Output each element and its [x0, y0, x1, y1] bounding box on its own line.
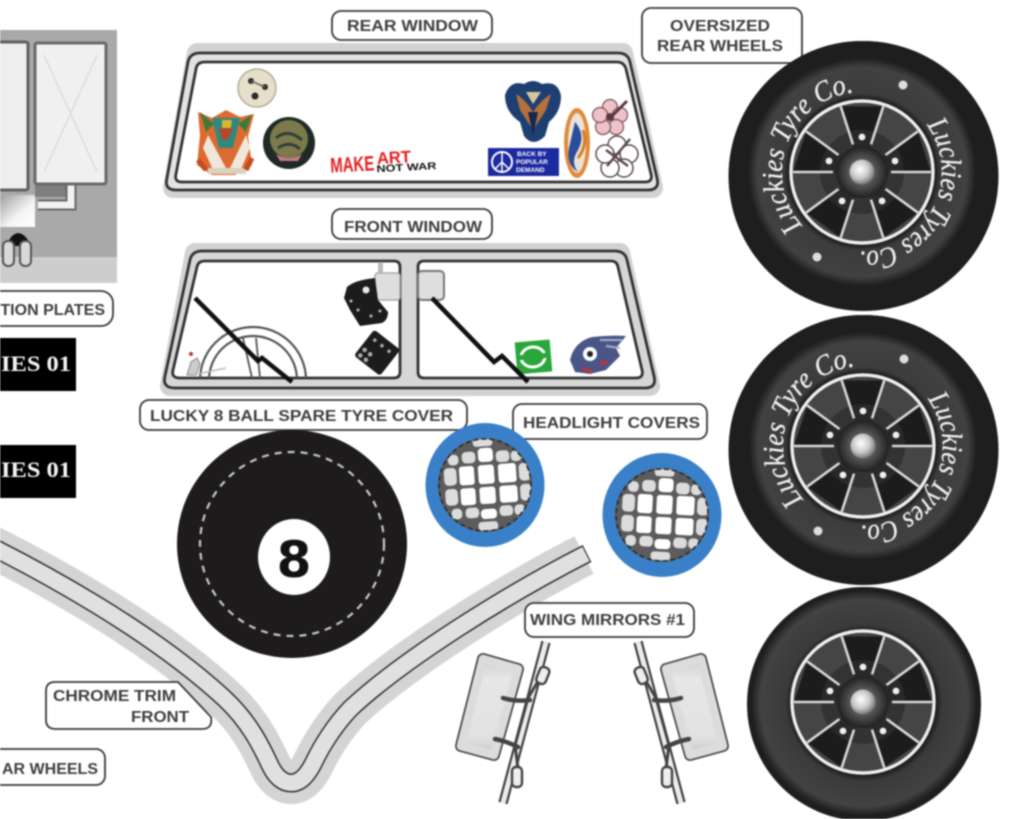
label: chrome trim front: CHROME TRIM	[53, 688, 176, 705]
label: oversized rear wheels: REAR WHEELS	[657, 38, 783, 55]
sticker: blue winged heart	[505, 81, 561, 142]
sun visor right	[418, 271, 444, 300]
chrome trim front	[0, 536, 587, 783]
sticker: back by popular demand: POPULAR	[516, 159, 548, 166]
sticker: back by popular demand: DEMAND	[516, 167, 545, 174]
sticker: beige button	[238, 69, 276, 107]
headlight cover left	[426, 423, 544, 547]
label: chrome trim front: FRONT	[131, 709, 189, 726]
label: lucky 8 ball spare tyre cover	[140, 400, 467, 430]
figurine on dashboard	[187, 352, 226, 375]
label: front window	[332, 209, 492, 239]
sticker: surf pin-up	[197, 110, 254, 175]
sticker: white flower	[596, 136, 638, 177]
label: headlight covers	[513, 404, 707, 439]
tyre: oversized rear wheel 2: Luckies Tyres Co.	[862, 390, 964, 544]
label: rear wheels	[0, 749, 105, 785]
front window	[160, 242, 660, 396]
wing mirror right	[633, 642, 723, 803]
wiper right	[432, 298, 528, 382]
sticker: surfboard	[564, 108, 590, 178]
tyre: oversized rear wheel 1: Luckies Tyre Co.	[762, 78, 852, 236]
sticker: back by popular demand	[488, 148, 559, 176]
label: construction plates: TION PLATES	[0, 302, 105, 319]
wing mirror left	[461, 642, 551, 803]
label: chrome trim front	[46, 682, 211, 729]
sticker: back by popular demand: BACK BY	[517, 151, 547, 158]
fuzzy die upper	[344, 278, 388, 326]
tyre: oversized rear wheel 1	[728, 40, 1000, 312]
tyre: oversized rear wheel 2	[728, 314, 1000, 586]
sticker: blue creature	[570, 336, 626, 374]
8 ball spare tyre cover	[177, 430, 407, 658]
sun visor left	[375, 262, 400, 300]
steering wheel	[198, 324, 308, 378]
sticker: green badge	[515, 339, 552, 374]
label: wing mirrors	[525, 603, 694, 637]
sticker: make art not war	[329, 146, 438, 178]
label: oversized rear wheels	[642, 8, 802, 63]
label: construction plates	[0, 291, 113, 326]
tyre: oversized rear wheel 2: Luckies Tyre Co.	[762, 352, 854, 510]
series plate 1: IES 01	[1, 351, 71, 376]
series plate 2	[0, 445, 76, 498]
tyre: standard wheel	[747, 587, 981, 819]
fuzzy die lower	[354, 330, 400, 376]
label: oversized rear wheels: OVERSIZED	[670, 18, 770, 35]
sticker: make art not war: ART	[376, 147, 412, 168]
label: rear wheels: AR WHEELS	[2, 761, 98, 778]
sticker: make art not war: MAKE	[330, 152, 375, 178]
label: rear window	[332, 11, 492, 40]
label: rear window: REAR WINDOW	[347, 18, 479, 35]
rear window	[166, 53, 658, 190]
8 ball spare tyre cover: 8	[277, 531, 311, 589]
headlight cover right	[602, 453, 722, 577]
tyre: oversized rear wheel 1: Luckies Tyres Co.	[860, 116, 963, 270]
label: wing mirrors: WING MIRRORS #1	[530, 612, 685, 629]
sticker: dark round badge	[263, 117, 315, 169]
series plate 2: IES 01	[1, 457, 71, 482]
wiper left	[195, 298, 292, 382]
label: headlight covers: HEADLIGHT COVERS	[523, 415, 700, 432]
sticker: make art not war: NOT WAR	[376, 161, 438, 175]
sticker: pink flower	[592, 100, 628, 134]
label: lucky 8 ball spare tyre cover: LUCKY 8 BALL SPARE TYRE COVER	[150, 408, 453, 425]
label: front window: FRONT WINDOW	[344, 219, 483, 236]
panel: construction plates sheet	[0, 30, 117, 283]
series plate 1	[0, 338, 76, 391]
